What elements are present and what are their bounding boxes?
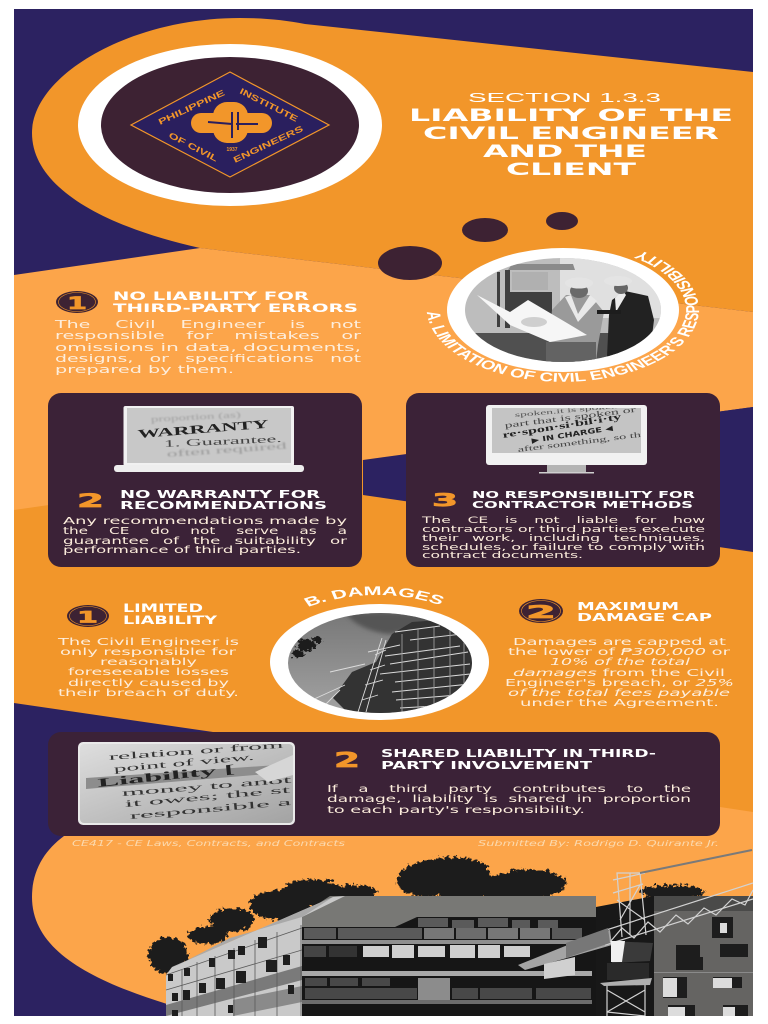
card: no warranty: RECOMMENDATIONS: [120, 499, 327, 512]
monitor illustration: re·spon·si·bil·i·ty: [502, 411, 623, 440]
item B1: limited liability: their breach of duty.: [58, 688, 239, 699]
item A1: no liability: THIRD-PARTY ERRORS: [113, 301, 358, 315]
dictionary photo: relation or from: [108, 740, 286, 763]
item B2: maximum damage cap: the lower of ₱300,000 or: [508, 647, 732, 658]
title block: AND THE: [483, 142, 647, 161]
card: no responsibility: schedules, or failure to comply with: [422, 543, 705, 553]
laptop illustration: proportion (as): [151, 410, 242, 424]
dictionary photo: money to anot: [121, 776, 293, 799]
card: no warranty: [48, 393, 362, 567]
item B1: limited liability: LIMITED: [123, 601, 203, 615]
background: navy diagonal band: [363, 407, 753, 552]
item B1: limited liability: reasonably: [100, 657, 197, 668]
dark void behind crane: [596, 896, 654, 1016]
logo knot: [191, 102, 272, 143]
badge 1: [67, 605, 109, 627]
card: shared liability: SHARED LIABILITY IN THIRD-: [381, 747, 656, 760]
footer author credit: Submitted By: Rodrigo D. Quirante Jr.: [478, 839, 719, 848]
leaves: [292, 637, 323, 658]
item B1: limited liability: The Civil Engineer is: [56, 637, 239, 648]
title block: CIVIL ENGINEER: [423, 124, 720, 143]
card: no responsibility: their work, including techniques,: [422, 534, 705, 544]
dictionary photo: point of view.: [113, 752, 255, 775]
item A1: no liability: NO LIABILITY FOR: [113, 289, 309, 303]
number 2: 2: [77, 490, 104, 512]
card: no responsibility: The CE is not liable for how: [420, 516, 705, 526]
dictionary photo: it owes; the st: [124, 785, 292, 810]
logo lettering: INSTITUTE: [240, 88, 298, 122]
card: no warranty: guarantee of the suitability or: [63, 536, 347, 547]
scaffolded tower: [333, 620, 472, 715]
building photo collage: [148, 850, 753, 1016]
laptop illustration: 1. Guarantee.: [164, 434, 282, 450]
section B photo circle: [270, 604, 489, 720]
title block: LIABILITY OF THE: [409, 106, 733, 125]
number 3: 3: [432, 490, 458, 511]
card: shared liability: damage, liability is shared in proportion: [327, 794, 691, 805]
background: mid orange lower field: [14, 440, 753, 830]
item A1: no liability: omissions in data, documents,: [55, 341, 361, 354]
laptop illustration: often required: [166, 441, 288, 459]
decorative bubbles: [378, 212, 578, 280]
title block: [409, 91, 733, 179]
background: top orange swoosh: [32, 18, 753, 312]
item B2: maximum damage cap: of the total fees payable: [508, 688, 730, 699]
roof slab: [290, 896, 596, 927]
monitor illustration: part that is spoken or: [504, 405, 637, 430]
item A1: no liability: designs, or specifications not: [55, 352, 362, 365]
monitor illustration: [486, 401, 647, 474]
laptop illustration: WARRANTY: [137, 417, 269, 441]
background: navy lower-left wedge: [14, 703, 213, 830]
item B2: maximum damage cap: 10% of the total: [550, 657, 690, 668]
item A1: no liability: [53, 289, 362, 376]
badge 1: 1: [77, 608, 98, 626]
logo lettering: [158, 88, 303, 163]
item B2: maximum damage cap: [505, 599, 734, 709]
badge 2: [519, 599, 563, 623]
monitor illustration: after something, so th: [517, 430, 642, 454]
crane: [518, 850, 753, 1016]
logo diamond: [131, 72, 329, 177]
engineer with vest: [546, 288, 604, 362]
left wing: [166, 896, 345, 1016]
logo medallion: [78, 44, 382, 206]
item A1: no liability: prepared by them.: [55, 363, 234, 376]
monitor illustration: ▶ IN CHARGE ◀: [531, 424, 614, 445]
item B1: limited liability: foreseeable losses: [68, 667, 229, 678]
card: no responsibility: contractors or third parties execute: [422, 525, 706, 535]
central glass block: [299, 915, 597, 1016]
card: no warranty: performance of third parties.: [63, 545, 301, 556]
item B2: maximum damage cap: MAXIMUM: [577, 600, 679, 613]
section A curved heading: A. LIMITATION OF CIVIL ENGINEER'S RESPONSIBILITY: [426, 252, 700, 382]
card: no warranty: the CE do not serve as a: [63, 526, 347, 537]
item B1: limited liability: directly caused by: [68, 678, 229, 689]
logo lettering: OF CIVIL: [170, 133, 216, 162]
section B curved heading: B. DAMAGES: [304, 586, 444, 606]
item B1: limited liability: [56, 601, 239, 699]
item B2: maximum damage cap: damages from the Civil: [513, 668, 725, 679]
engineer in suit: [597, 284, 654, 356]
trees: [148, 857, 704, 973]
number 2: 2: [334, 748, 360, 772]
item B2: maximum damage cap: Engineer's breach, or 25%: [505, 678, 734, 689]
laptop illustration: [114, 406, 304, 472]
badge 1: [56, 291, 98, 313]
item B1: limited liability: LIABILITY: [123, 613, 218, 627]
footer course label: CE417 - CE Laws, Contracts, and Contracts: [72, 839, 345, 848]
card: no warranty: Any recommendations made by: [63, 516, 348, 527]
logo lettering: ENGINEERS: [233, 126, 303, 163]
item B2: maximum damage cap: DAMAGE CAP: [577, 611, 712, 624]
card: no responsibility: CONTRACTOR METHODS: [472, 500, 693, 511]
title block: CLIENT: [506, 160, 637, 179]
card: no responsibility: NO RESPONSIBILITY FOR: [472, 490, 695, 501]
right tower: [654, 896, 753, 1016]
item A1: no liability: responsible for mistakes or: [55, 329, 362, 342]
section A photo circle: [447, 248, 679, 372]
dictionary photo: Liability [: [97, 762, 236, 790]
title block: SECTION 1.3.3: [468, 91, 661, 105]
card: shared liability: If a third party contributes to the: [327, 784, 691, 795]
item B2: maximum damage cap: under the Agreement.: [520, 698, 719, 709]
card: no warranty: NO WARRANTY FOR: [120, 488, 321, 501]
item B2: maximum damage cap: Damages are capped at: [513, 637, 726, 648]
logo lettering: PHILIPPINE: [158, 90, 225, 125]
dictionary photo: responsible a: [129, 798, 294, 822]
upper window rows: [304, 918, 582, 939]
badge 2: 2: [526, 602, 556, 623]
card: no responsibility: [406, 393, 720, 567]
card: shared liability: [48, 732, 720, 836]
card: no responsibility: contract documents.: [422, 551, 583, 561]
monitor illustration: spoken.it is spoken out: [515, 401, 639, 419]
background: light orange band: [14, 248, 753, 510]
item B1: limited liability: only responsible for: [60, 647, 238, 658]
badge 1: 1: [67, 294, 87, 313]
background: light orange bottom swoosh: [32, 807, 753, 1004]
card: shared liability: to each party's responsibility.: [327, 805, 585, 816]
item A1: no liability: The Civil Engineer is not: [53, 318, 362, 331]
dictionary photo: [78, 740, 295, 825]
logo lettering: 1937: [226, 147, 238, 153]
blueprint: [477, 295, 587, 342]
card: shared liability: PARTY INVOLVEMENT: [381, 759, 593, 772]
